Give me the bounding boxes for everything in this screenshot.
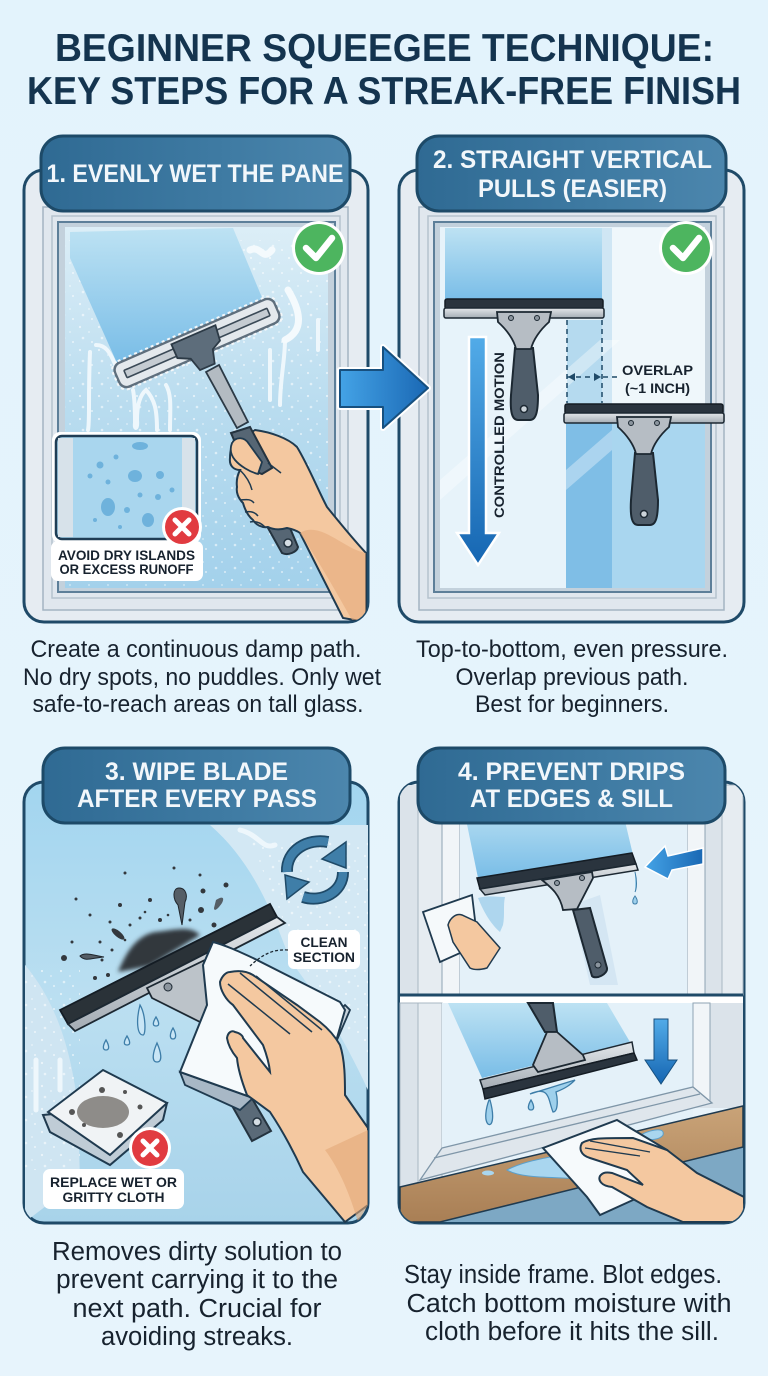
text: step 3 description: Removes dirty solution to	[52, 1238, 342, 1266]
text: step 3 description: prevent carrying it to the	[56, 1266, 338, 1294]
dirty cloth	[43, 1070, 167, 1165]
heading pill 1: 1. EVENLY WET THE PANE	[46, 160, 344, 188]
text: step 1 description: Create a continuous damp path.	[30, 636, 362, 663]
heading pill 2: PULLS (EASIER)	[478, 175, 667, 203]
label: avoid dry islands: AVOID DRY ISLANDS	[58, 548, 195, 563]
title	[27, 27, 741, 113]
label: clean section: CLEAN	[300, 935, 348, 950]
icon: refresh arrows	[285, 841, 346, 899]
text: step 2 description: Top-to-bottom, even pressure.	[416, 636, 728, 663]
label: clean section: SECTION	[293, 950, 355, 965]
squeegee washer	[109, 294, 289, 428]
glass with overlap strips	[440, 227, 705, 588]
icon: red x	[129, 1127, 171, 1169]
label: clean section	[250, 930, 360, 969]
text: step 4 description	[404, 1261, 732, 1346]
overlap marker: (~1 INCH)	[625, 381, 690, 396]
label: replace cloth	[43, 1169, 184, 1209]
lower squeegee	[480, 1003, 637, 1125]
upper scene	[400, 785, 743, 995]
text: step 1 description: safe-to-reach areas on tall glass.	[32, 691, 364, 718]
overlap marker: OVERLAP	[622, 363, 693, 378]
text: step 2 description: Overlap previous path.	[456, 664, 688, 691]
dirt splatter	[61, 866, 228, 982]
heading pill 2: 2. STRAIGHT VERTICAL	[433, 146, 712, 174]
panel: step 4 prevent drips	[399, 748, 744, 1223]
hand with cloth at sill	[543, 1120, 744, 1222]
arrow: downward	[645, 1019, 677, 1084]
squeegee top	[444, 299, 604, 420]
overlap marker	[567, 320, 693, 403]
text: step 4 description: Catch bottom moisture with	[406, 1290, 732, 1318]
arrow: controlled motion: CONTROLLED MOTION	[492, 352, 507, 518]
text: step 4 description: cloth before it hits the sill.	[425, 1318, 719, 1346]
wiping hand	[220, 971, 368, 1222]
text: step 3 description: avoiding streaks.	[101, 1323, 293, 1351]
squeegee bottom	[564, 404, 724, 525]
icon: green check	[659, 221, 713, 275]
upper squeegee	[477, 853, 638, 977]
heading pill 1	[41, 136, 350, 211]
label: avoid dry islands	[51, 541, 203, 581]
label: replace cloth: REPLACE WET OR	[50, 1175, 177, 1190]
small hand with cloth	[423, 895, 505, 970]
text: step 4 description: Stay inside frame. Blot edges.	[404, 1261, 722, 1289]
icon: green check	[292, 221, 346, 275]
wet glass	[65, 227, 328, 588]
arrow: toward edge	[645, 846, 703, 879]
text: step 2 description	[416, 636, 728, 718]
inset: avoid dry islands	[51, 432, 203, 581]
wet glass background	[25, 825, 368, 1222]
panel: step 2 straight vertical pulls	[399, 136, 744, 622]
squeegee being wiped	[60, 904, 285, 1141]
heading pill 3: 3. WIPE BLADE	[105, 758, 288, 786]
divider	[400, 994, 743, 1003]
hand holding squeegee	[230, 427, 366, 622]
heading pill 4	[418, 748, 725, 823]
text: step 1 description: No dry spots, no puddles. Only wet	[23, 664, 381, 691]
heading pill 2	[417, 136, 726, 211]
panel: step 1 evenly wet the pane	[24, 136, 368, 622]
text: step 2 description: Best for beginners.	[475, 691, 669, 718]
label: avoid dry islands: OR EXCESS RUNOFF	[60, 562, 194, 577]
heading pill 4: AT EDGES & SILL	[470, 785, 673, 813]
text: step 3 description: next path. Crucial for	[72, 1295, 322, 1323]
water drops	[103, 1005, 176, 1062]
arrow: step 1 to step 2	[340, 347, 428, 428]
heading pill 4: 4. PREVENT DRIPS	[458, 758, 685, 786]
panel: step 3 wipe blade	[24, 748, 368, 1223]
heading pill 3: AFTER EVERY PASS	[77, 785, 317, 813]
arrow: controlled motion	[457, 337, 507, 565]
wiping cloth	[180, 942, 350, 1110]
icon: red x	[162, 507, 202, 547]
label: replace cloth: GRITTY CLOTH	[62, 1190, 164, 1205]
text: step 3 description	[52, 1238, 342, 1351]
lower scene	[400, 1003, 743, 1222]
heading pill 3	[43, 748, 350, 823]
title: BEGINNER SQUEEGEE TECHNIQUE:	[55, 27, 714, 70]
text: step 1 description	[23, 636, 381, 718]
